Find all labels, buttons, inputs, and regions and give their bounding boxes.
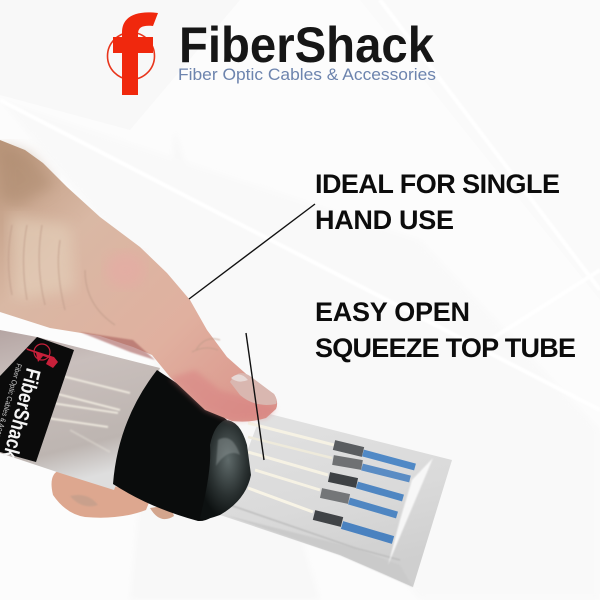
callout text: squeeze top tube: EASY OPEN <box>315 297 470 327</box>
logo icon: red f <box>108 12 158 95</box>
tube body <box>0 330 160 490</box>
bag <box>220 412 452 587</box>
callout text: single hand use: HAND USE <box>315 205 454 235</box>
fiber 2 <box>248 437 410 479</box>
callout text: single hand use <box>315 169 560 235</box>
callout text: squeeze top tube: SQUEEZE TOP TUBE <box>315 333 576 363</box>
logo tagline: Fiber Optic Cables & Accessories <box>178 66 436 84</box>
lower fingers <box>52 470 174 519</box>
thumbnail <box>230 373 277 405</box>
plastic bag with fibers <box>220 412 452 587</box>
band logo mark <box>26 344 58 368</box>
logo <box>108 12 436 95</box>
callout text: single hand use: IDEAL FOR SINGLE <box>315 169 560 199</box>
pointer line: single hand <box>189 204 315 299</box>
shading <box>0 145 55 205</box>
bag crinkle highlight <box>388 458 433 565</box>
squeeze tube <box>0 330 251 521</box>
fiber 1 <box>248 423 415 467</box>
knuckle wrinkles <box>8 225 220 352</box>
hand <box>0 140 277 422</box>
tube inner fibers <box>40 375 130 452</box>
logo wordmark: FiberShack <box>179 17 434 73</box>
cap end <box>200 420 251 519</box>
tube label band <box>0 337 74 462</box>
fiber 5 <box>248 488 393 540</box>
callout text: squeeze top tube <box>315 297 576 363</box>
pointer line: squeeze top <box>246 333 264 460</box>
fiber 4 <box>255 470 397 515</box>
black cap <box>113 370 227 521</box>
hand lower shadow <box>80 332 155 360</box>
fiber 3 <box>248 452 403 498</box>
